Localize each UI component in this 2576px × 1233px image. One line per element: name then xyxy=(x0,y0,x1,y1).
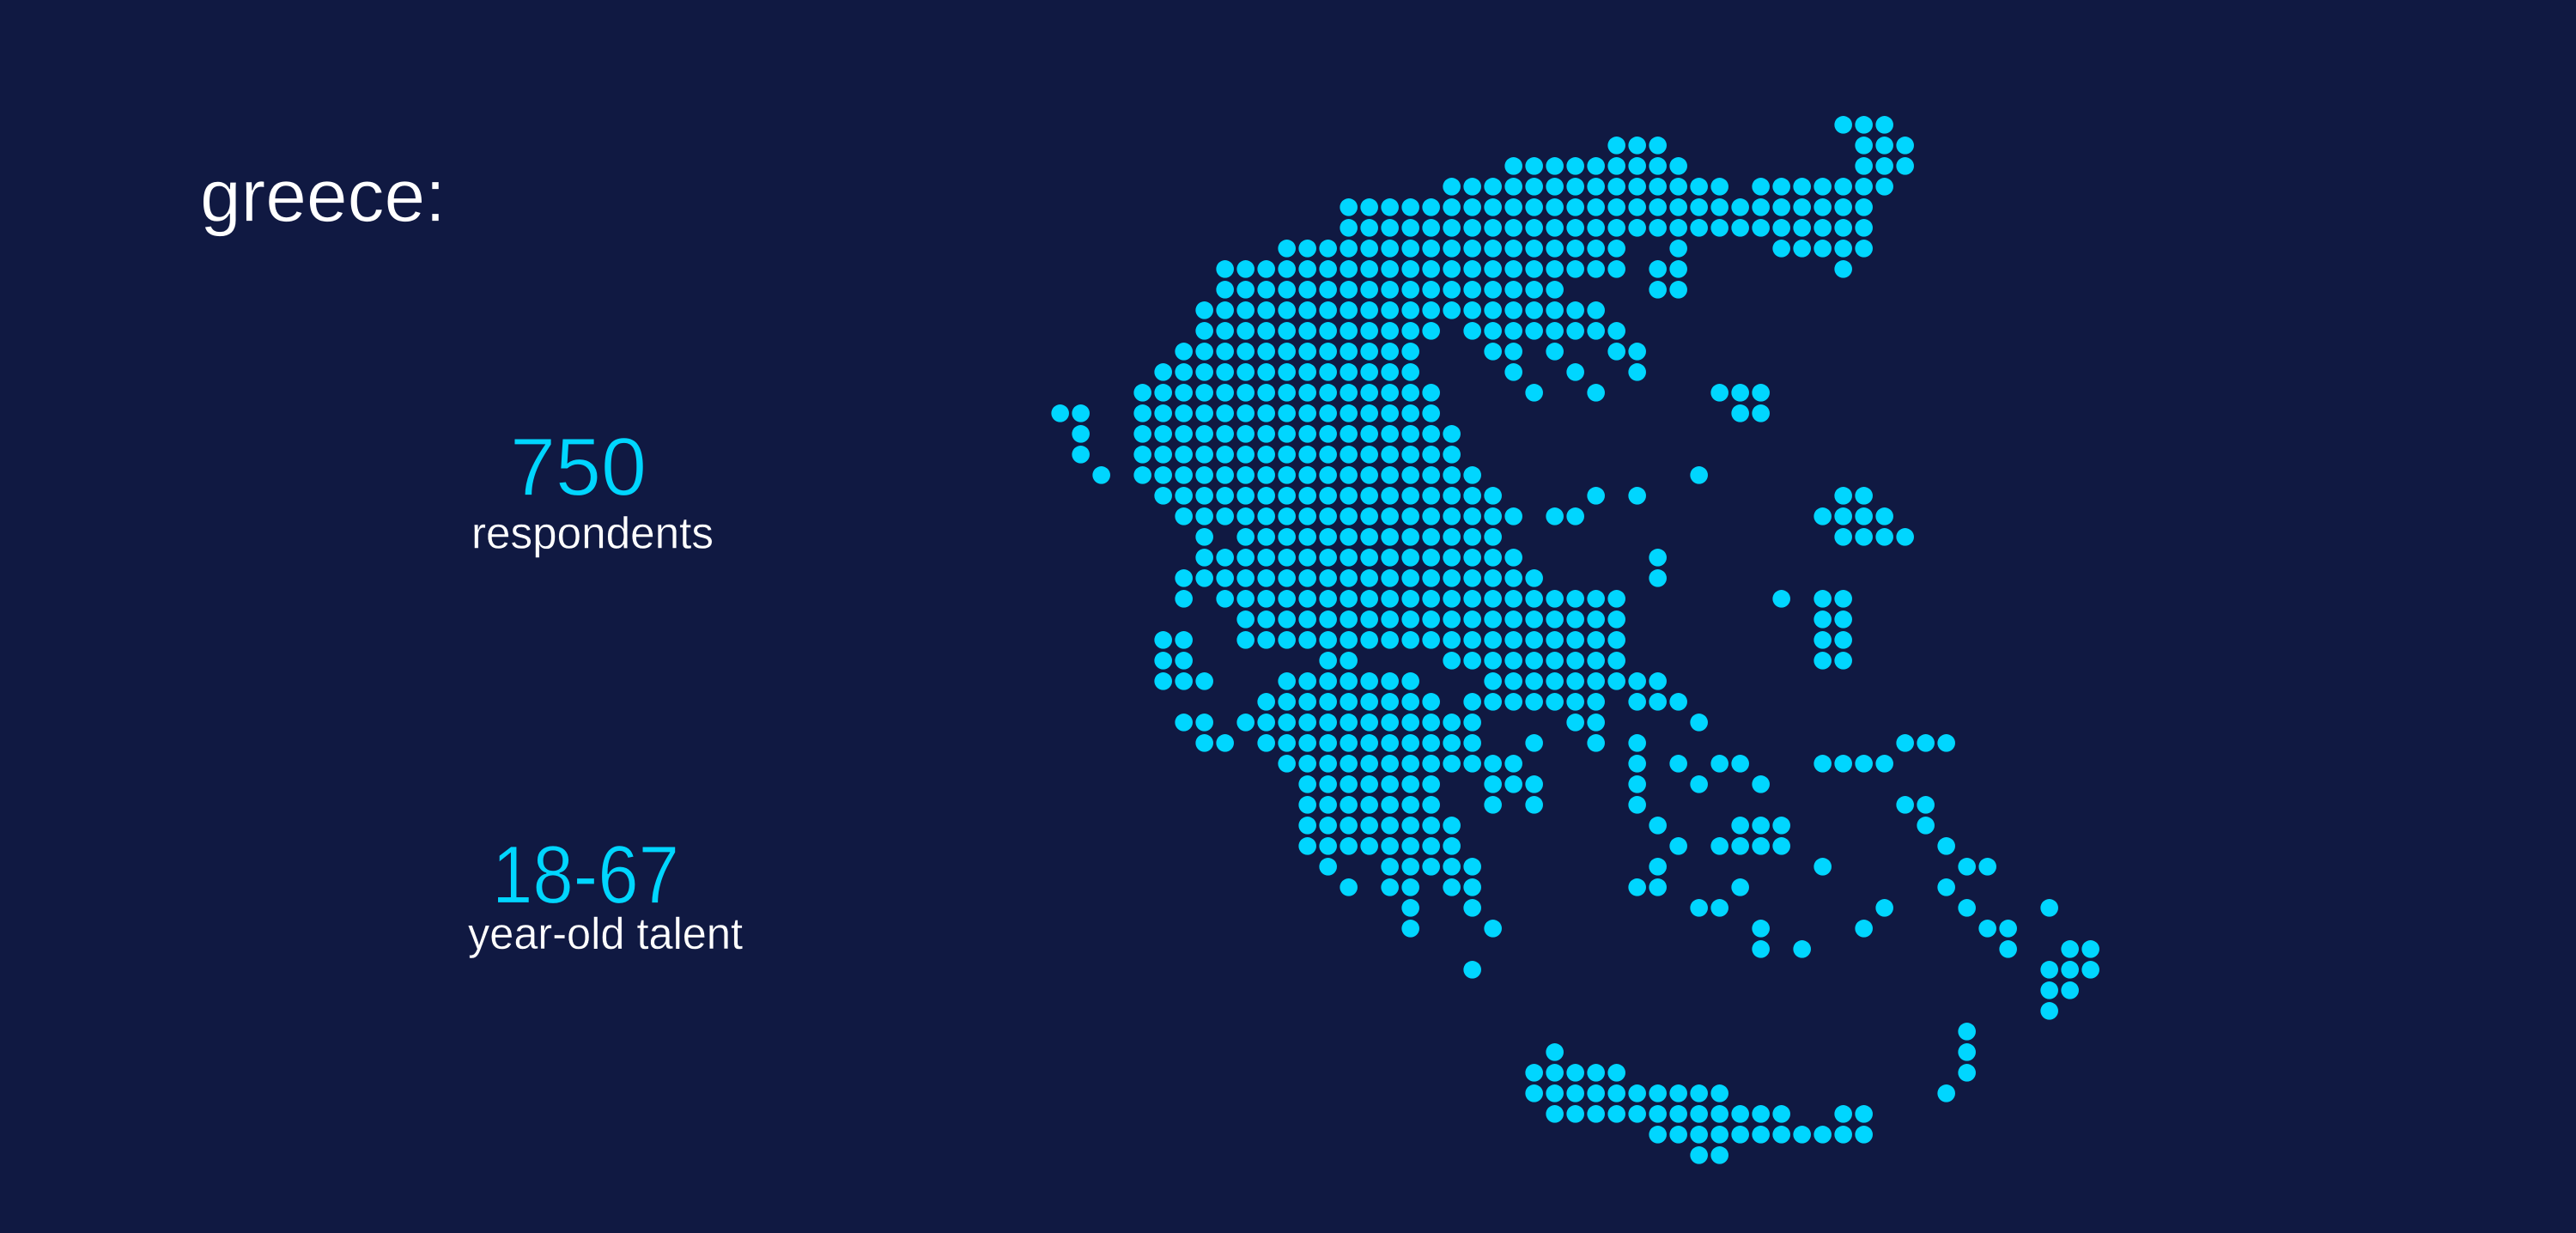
stat label: year-old talent: year-old talent xyxy=(468,909,744,959)
stat label: respondents: respondents xyxy=(471,509,714,559)
stat: 750 respondents xyxy=(471,422,714,559)
stat number: 750: 750 xyxy=(510,422,647,513)
stat: 18-67 year-old talent xyxy=(468,829,744,959)
map: mainland and Peloponnese xyxy=(1143,125,1905,969)
stat number: 18-67: 18-67 xyxy=(492,829,679,921)
map: Crete xyxy=(1534,1052,1864,1155)
title: greece: xyxy=(200,155,446,237)
map: Ionian islands xyxy=(1060,413,1225,743)
map: Rhodes xyxy=(2050,949,2091,1011)
map: Aegean islands xyxy=(1555,392,2050,1093)
dot-matrix map of Greece xyxy=(1060,125,2091,1155)
